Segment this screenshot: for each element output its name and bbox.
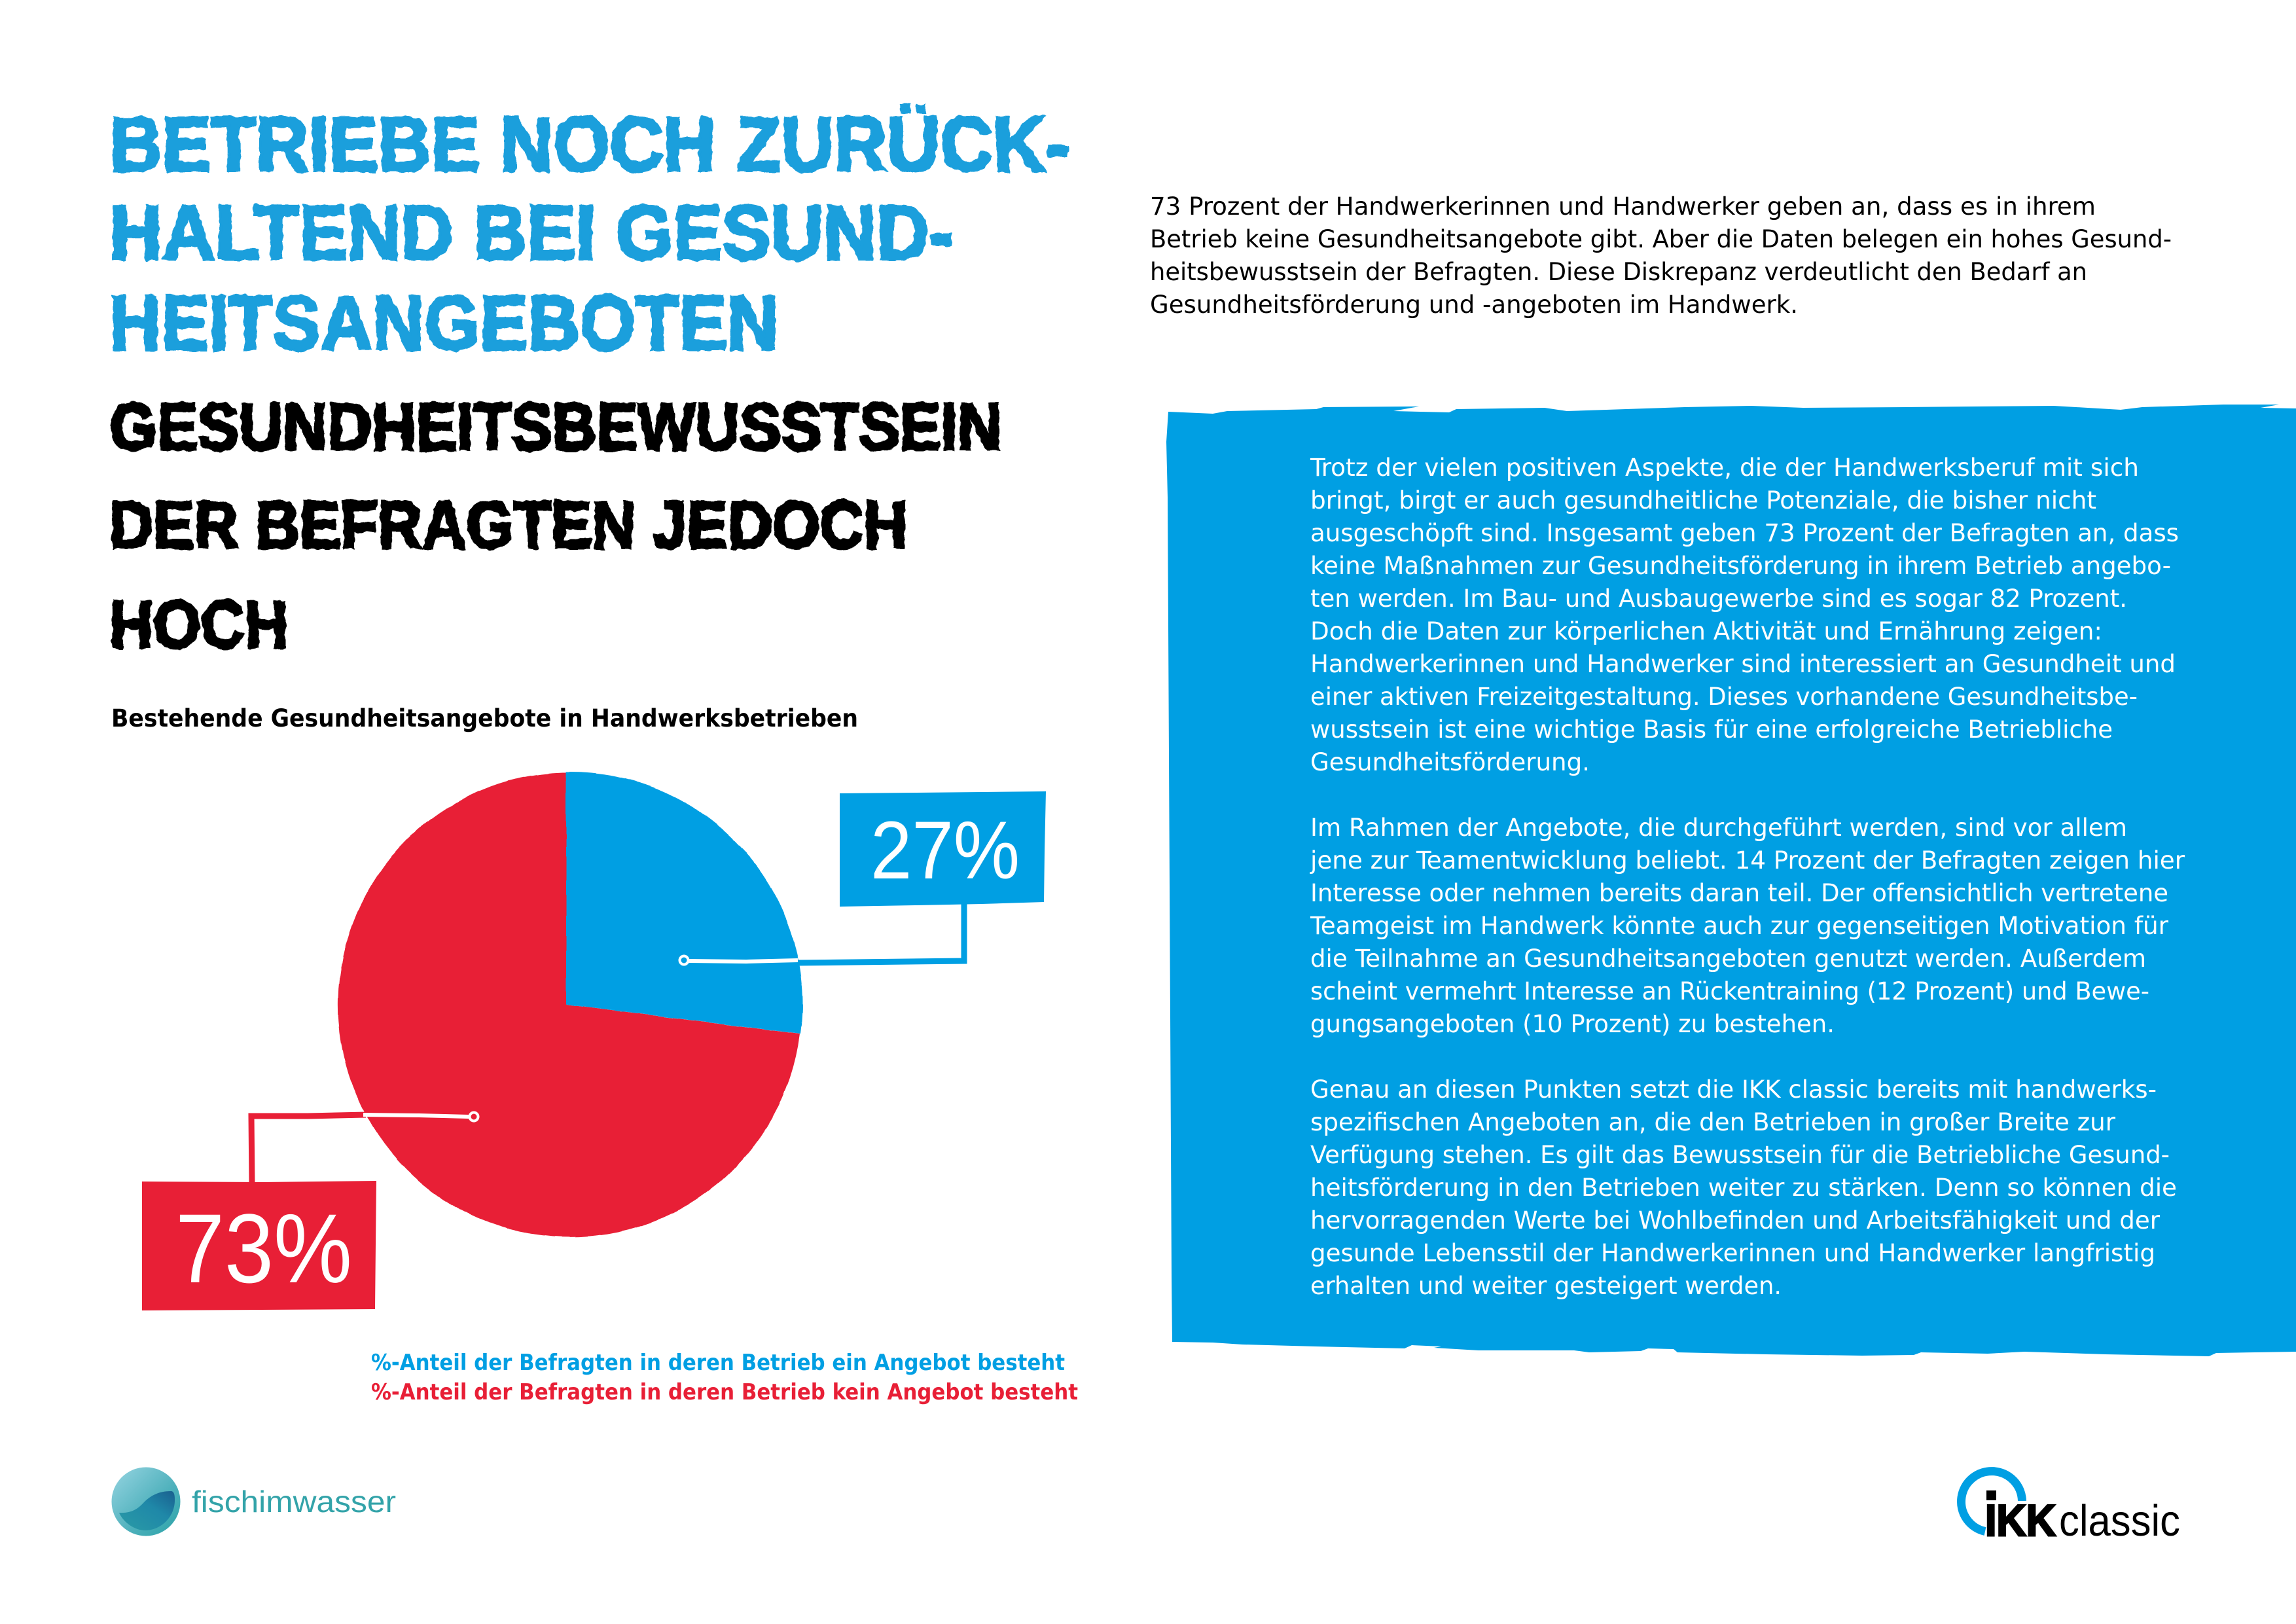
panel body text <box>1310 454 2185 1300</box>
panel body text: die Teilnahme an Gesundheitsangeboten genutzt werden. Außerdem <box>1310 945 2146 973</box>
value: 73% <box>175 1193 352 1303</box>
value: 27% <box>870 805 1020 896</box>
legend <box>371 1350 1078 1405</box>
wordmark: classic: classic <box>2059 1496 2180 1545</box>
subtitle: black headline: GESUNDHEITSBEWUSSTSEIN <box>109 389 1002 464</box>
connector: red <box>251 1115 366 1183</box>
connector: blue <box>795 903 964 963</box>
panel background <box>1166 405 2296 1356</box>
panel body text: Doch die Daten zur körperlichen Aktivität und Ernährung zeigen: <box>1310 617 2102 645</box>
connector: white inside pie <box>363 1115 469 1117</box>
legend: %-Anteil der Befragten in deren Betrieb kein Angebot besteht <box>371 1379 1078 1405</box>
wordmark: IKK: IKK <box>1985 1496 2056 1545</box>
box <box>840 791 1046 907</box>
panel body text: scheint vermehrt Interesse an Rückentraining (12 Prozent) und Bewe- <box>1310 977 2149 1005</box>
panel: blue text block <box>1166 405 2296 1356</box>
panel body text: bringt, birgt er auch gesundheitliche Potenziale, die bisher nicht <box>1310 486 2096 514</box>
panel body text: erhalten und weiter gesteigert werden. <box>1310 1272 1782 1300</box>
chart heading: Bestehende Gesundheitsangebote in Handwerksbetrieben <box>111 704 858 732</box>
panel body text: keine Maßnahmen zur Gesundheitsförderung in ihrem Betrieb angebo- <box>1310 552 2171 580</box>
panel body text: Genau an diesen Punkten setzt die IKK classic bereits mit handwerks- <box>1310 1075 2157 1104</box>
pie chart <box>338 772 802 1237</box>
marker dot <box>679 956 689 965</box>
panel body text: einer aktiven Freizeitgestaltung. Dieses vorhandene Gesundheitsbe- <box>1310 683 2138 711</box>
panel body text: Teamgeist im Handwerk könnte auch zur gegenseitigen Motivation für <box>1310 912 2168 940</box>
icon: i dot <box>1986 1490 1996 1500</box>
callout: 73 percent <box>142 1113 478 1310</box>
icon: ring <box>1962 1471 2022 1532</box>
title: blue headline: BETRIEBE NOCH ZURÜCK- <box>109 101 1070 188</box>
wordmark: fischimwasser <box>192 1485 396 1519</box>
logo: IKK classic <box>1962 1471 2180 1545</box>
subtitle: black headline <box>109 389 1002 662</box>
marker dot <box>470 1113 478 1121</box>
panel body text: jene zur Teamentwicklung beliebt. 14 Prozent der Befragten zeigen hier <box>1310 846 2185 875</box>
icon: water circle <box>111 1468 181 1536</box>
panel body text: hervorragenden Werte bei Wohlbefinden und Arbeitsfähigkeit und der <box>1310 1206 2160 1235</box>
panel body text: heitsförderung in den Betrieben weiter zu stärken. Denn so können die <box>1310 1174 2177 1202</box>
title: blue headline <box>109 101 1070 367</box>
panel body text: spezifischen Angeboten an, die den Betrieben in großer Breite zur <box>1310 1108 2115 1136</box>
panel body text: Im Rahmen der Angebote, die durchgeführt werden, sind vor allem <box>1310 814 2127 842</box>
panel body text: gesunde Lebensstil der Handwerkerinnen und Handwerker langfristig <box>1310 1239 2155 1267</box>
panel body text: Trotz der vielen positiven Aspekte, die der Handwerksberuf mit sich <box>1310 454 2139 482</box>
logo: fischimwasser <box>111 1468 396 1536</box>
intro text: Betrieb keine Gesundheitsangebote gibt. Aber die Daten belegen ein hohes Gesund- <box>1150 225 2172 253</box>
intro text <box>1150 192 2172 319</box>
panel body text: Verfügung stehen. Es gilt das Bewusstsein für die Betriebliche Gesund- <box>1310 1141 2170 1169</box>
intro text: 73 Prozent der Handwerkerinnen und Handwerker geben an, dass es in ihrem <box>1150 192 2096 221</box>
pie slice: 27 percent <box>566 772 802 1034</box>
title: blue headline: HALTEND BEI GESUND- <box>109 190 954 276</box>
title: blue headline: HEITSANGEBOTEN <box>109 280 779 367</box>
subtitle: black headline: HOCH <box>109 587 289 662</box>
intro text: Gesundheitsförderung und -angeboten im Handwerk. <box>1150 291 1798 319</box>
connector: white inside pie <box>689 960 798 962</box>
panel body text: wusstsein ist eine wichtige Basis für eine erfolgreiche Betriebliche <box>1310 715 2113 744</box>
panel body text: Gesundheitsförderung. <box>1310 748 1590 776</box>
panel body text: ausgeschöpft sind. Insgesamt geben 73 Prozent der Befragten an, dass <box>1310 519 2179 547</box>
intro text: heitsbewusstsein der Befragten. Diese Diskrepanz verdeutlicht den Bedarf an <box>1150 258 2087 286</box>
box <box>142 1181 376 1310</box>
legend: %-Anteil der Befragten in deren Betrieb ein Angebot besteht <box>371 1350 1065 1376</box>
panel body text: ten werden. Im Bau- und Ausbaugewerbe sind es sogar 82 Prozent. <box>1310 585 2127 613</box>
callout: 27 percent <box>679 791 1046 965</box>
pie slice: 73 percent <box>338 772 800 1237</box>
panel body text: gungsangeboten (10 Prozent) zu bestehen. <box>1310 1010 1835 1038</box>
panel body text: Handwerkerinnen und Handwerker sind interessiert an Gesundheit und <box>1310 650 2176 678</box>
panel body text: Interesse oder nehmen bereits daran teil. Der offensichtlich vertretene <box>1310 879 2168 907</box>
subtitle: black headline: DER BEFRAGTEN JEDOCH <box>109 488 908 562</box>
